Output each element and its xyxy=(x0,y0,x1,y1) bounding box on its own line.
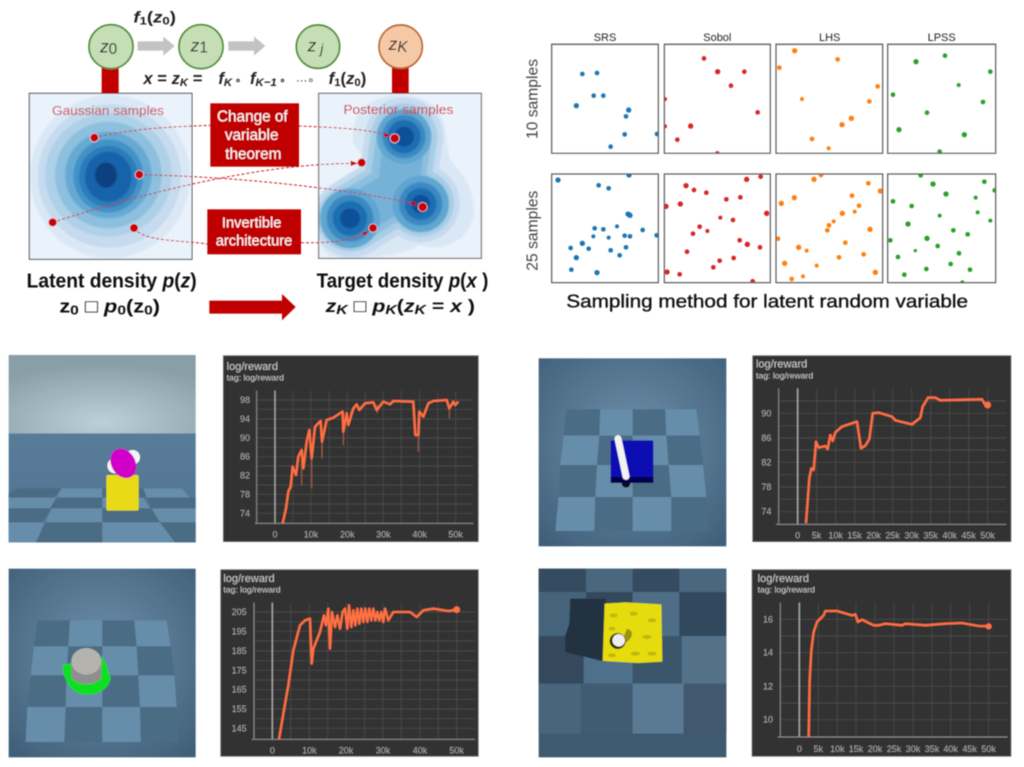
panel: top-left simulation and reward xyxy=(9,355,478,542)
reward chart 1: 50k xyxy=(448,530,463,540)
reward chart 3: 155 xyxy=(232,704,247,714)
label f1(z0): ( xyxy=(147,9,154,26)
caption: target density: Target density p(x ) xyxy=(317,270,488,292)
reward chart 3: 165 xyxy=(232,685,247,695)
reward chart 1: log/reward xyxy=(227,361,278,373)
caption: target density: K xyxy=(385,302,398,317)
reward chart 2: 25k xyxy=(885,530,900,540)
reward chart 1: 20k xyxy=(340,530,355,540)
target density plot xyxy=(318,93,481,258)
posterior sample points xyxy=(357,134,427,232)
column headings: SRS xyxy=(594,32,616,44)
reward chart 1: 40k xyxy=(412,530,427,540)
scatter: LHS 25 samples xyxy=(776,173,883,283)
simulation scene: magenta object on yellow cube xyxy=(9,355,196,542)
column headings: Sobol xyxy=(703,32,731,44)
reward chart 2: 40k xyxy=(942,530,957,540)
reward chart 2: 50k xyxy=(980,530,995,540)
reward chart 4: 14 xyxy=(763,648,773,658)
callout: change of variable theorem: variable xyxy=(225,127,279,144)
callout: change of variable theorem: Change of xyxy=(217,109,288,126)
reward chart 2: 15k xyxy=(847,530,862,540)
reward chart 4: 10k xyxy=(830,744,845,754)
latent sample points xyxy=(48,133,144,232)
reward chart 1: 82 xyxy=(240,471,250,481)
composition formula: = xyxy=(188,69,207,88)
reward chart 4: 20k xyxy=(868,744,883,754)
composition formula: ···∘ xyxy=(296,75,314,87)
caption: latent density: p xyxy=(103,296,117,317)
reward chart 3: 195 xyxy=(232,626,247,636)
composition formula: f xyxy=(329,69,336,88)
reward chart 2 xyxy=(753,356,1011,542)
composition formula: f xyxy=(218,69,225,88)
reward chart 3: tag: log/reward xyxy=(223,584,281,594)
reward chart 4: 16 xyxy=(763,614,773,624)
latent variable chain nodes: z xyxy=(308,35,316,55)
scatter: Sobol 10 samples xyxy=(663,44,770,155)
reward chart 3: 145 xyxy=(232,723,247,733)
reward chart 1: 10k xyxy=(304,530,319,540)
caption: target density: x ) xyxy=(450,296,473,316)
latent variable chain nodes: 1 xyxy=(199,40,208,57)
reward chart 1: 90 xyxy=(240,433,250,443)
reward chart 2: 90 xyxy=(761,408,771,418)
caption: latent density xyxy=(27,270,197,318)
reward chart 2: tag: log/reward xyxy=(756,370,813,380)
latent density plot xyxy=(29,93,192,259)
composition formula: ( xyxy=(341,69,347,88)
composition formula: 1 xyxy=(334,77,341,89)
reward chart 4: 35k xyxy=(925,744,940,754)
composition formula: 0 xyxy=(354,77,361,89)
simulation scene: grey cylinder on green ring xyxy=(9,569,196,757)
composition formula: K xyxy=(224,77,233,89)
reward chart 1: 30k xyxy=(376,530,391,540)
callout: invertible architecture: architecture xyxy=(216,234,292,250)
latent variable chain nodes: z xyxy=(191,35,199,55)
caption: target density: z xyxy=(403,296,415,316)
row label: 10 samples: 10 samples xyxy=(524,59,541,139)
reward chart 2: 30k xyxy=(904,530,919,540)
reward chart 3: 30k xyxy=(376,746,391,756)
label: Gaussian samples: Gaussian samples xyxy=(52,103,164,118)
reward chart 4 xyxy=(752,570,1011,756)
latent variable chain nodes: z xyxy=(389,34,397,54)
caption: latent density: 0 xyxy=(144,303,153,318)
column headings xyxy=(594,32,956,44)
column headings: LPSS xyxy=(928,32,956,44)
reward chart 3: 205 xyxy=(232,607,247,617)
reward chart 1: 0 xyxy=(272,530,277,540)
reward chart 4: 0 xyxy=(797,744,802,754)
reward chart 1 xyxy=(223,356,478,542)
caption: target density: p xyxy=(371,296,385,316)
latent variable chain nodes xyxy=(89,25,422,69)
caption: target density: □ xyxy=(348,296,372,316)
reward chart 3: 0 xyxy=(270,746,275,756)
composition formula: x = z xyxy=(143,69,180,88)
composition formula: ∘ xyxy=(232,76,244,87)
label f1(z0): 1 xyxy=(140,15,147,27)
composition formula: f xyxy=(250,69,257,88)
reward chart 4: 5k xyxy=(814,744,824,754)
reward chart 3: log/reward xyxy=(223,573,275,585)
scatter: LPSS 25 samples xyxy=(888,173,997,284)
caption: target density: z xyxy=(324,296,336,316)
reward chart 2: 20k xyxy=(866,530,881,540)
label f1(z0): f xyxy=(133,9,141,26)
label f1(z0): 0 xyxy=(162,15,170,27)
reward chart 1: 94 xyxy=(240,414,250,424)
composition formula: z xyxy=(345,69,355,88)
reward chart 2: 74 xyxy=(761,507,771,517)
reward chart 2: 5k xyxy=(812,530,822,540)
scatter: SRS 10 samples xyxy=(552,44,659,153)
reward chart 1: 98 xyxy=(240,395,250,405)
label f1(z0): ) xyxy=(170,9,176,26)
scatter: LHS 10 samples xyxy=(776,44,883,153)
latent variable chain nodes: 0 xyxy=(109,41,117,58)
sample mapping arrows xyxy=(53,125,418,244)
caption: target density: = xyxy=(426,296,450,316)
reward chart 4: 10 xyxy=(763,715,773,725)
arrows between nodes xyxy=(138,37,265,56)
reward chart 2: 82 xyxy=(761,457,771,467)
reward chart 3 xyxy=(221,570,478,756)
reward chart 2: 0 xyxy=(795,530,800,540)
reward chart 4: tag: log/reward xyxy=(758,584,815,594)
panel: normalizing flow diagram xyxy=(27,9,488,320)
reward chart 1: 74 xyxy=(240,508,250,518)
latent variable chain nodes: K xyxy=(397,39,408,56)
panel: bottom-left simulation and reward xyxy=(9,569,478,757)
simulation scene: white rod on blue block xyxy=(539,358,726,546)
caption: latent density: 0 xyxy=(70,303,79,318)
reward chart 4: 50k xyxy=(981,744,996,754)
reward chart 3: 10k xyxy=(302,746,317,756)
simulation scene: ball on yellow block xyxy=(539,569,726,757)
row label: 25 samples: 25 samples xyxy=(524,190,541,271)
reward chart 2: log/reward xyxy=(756,359,807,371)
connector bars xyxy=(102,67,409,93)
reward chart 3: 20k xyxy=(339,746,354,756)
reward chart 1: 78 xyxy=(240,489,250,499)
reward chart 2: 78 xyxy=(761,482,771,492)
panel: top-right simulation and reward xyxy=(539,356,1011,546)
callout: invertible architecture: Invertible xyxy=(222,216,281,232)
caption: target density xyxy=(317,270,488,317)
reward chart 2: 10k xyxy=(828,530,843,540)
reward chart 3: 175 xyxy=(232,665,247,675)
big red arrow xyxy=(209,294,296,320)
reward chart 3: 40k xyxy=(413,746,428,756)
reward chart 2: 45k xyxy=(961,530,976,540)
latent variable chain nodes: j xyxy=(316,40,324,56)
reward chart 4: 25k xyxy=(887,744,902,754)
label: Posterior samples: Posterior samples xyxy=(343,102,454,117)
composition formula: ∘ xyxy=(277,76,288,87)
reward chart 4: log/reward xyxy=(758,573,809,585)
reward chart 4: 12 xyxy=(763,681,773,691)
scatter: LPSS 10 samples xyxy=(888,44,996,154)
caption: target density: ( xyxy=(397,296,404,316)
reward chart 3: 50k xyxy=(449,746,464,756)
column headings: LHS xyxy=(819,32,840,44)
callout: change of variable theorem xyxy=(210,103,299,167)
panel: sampling method scatter grid xyxy=(524,32,997,311)
reward chart 4: 15k xyxy=(849,744,864,754)
callout: invertible architecture xyxy=(207,209,301,254)
caption: latent density: Latent density p(z) xyxy=(27,270,197,292)
reward chart 3: 185 xyxy=(232,646,247,656)
reward chart 1: tag: log/reward xyxy=(227,372,284,382)
reward chart 4: 30k xyxy=(906,744,921,754)
label f1(z0): z xyxy=(152,9,162,26)
axis caption: Sampling method for latent random variable xyxy=(566,290,968,311)
reward chart 4: 45k xyxy=(962,744,977,754)
caption: target density: K xyxy=(336,302,349,317)
reward chart 1: 86 xyxy=(240,452,250,462)
panel: bottom-right simulation and reward xyxy=(539,569,1011,757)
caption: latent density: □ xyxy=(79,296,104,317)
composition formula: K−1 xyxy=(256,77,277,89)
scatter: Sobol 25 samples xyxy=(663,174,770,284)
caption: latent density: ) xyxy=(153,296,160,317)
scatter: SRS 25 samples xyxy=(552,172,659,283)
composition formula: K xyxy=(180,77,189,89)
caption: latent density: z xyxy=(59,296,70,317)
composition formula: ) xyxy=(361,69,366,88)
caption: latent density: 0 xyxy=(117,303,126,318)
caption: latent density: (z xyxy=(126,296,144,317)
reward chart 2: 86 xyxy=(761,433,771,443)
reward chart 2: 35k xyxy=(923,530,938,540)
caption: target density: K xyxy=(415,302,428,317)
latent variable chain nodes: z xyxy=(100,37,109,57)
callout: change of variable theorem: theorem xyxy=(225,146,281,163)
reward chart 4: 40k xyxy=(943,744,958,754)
